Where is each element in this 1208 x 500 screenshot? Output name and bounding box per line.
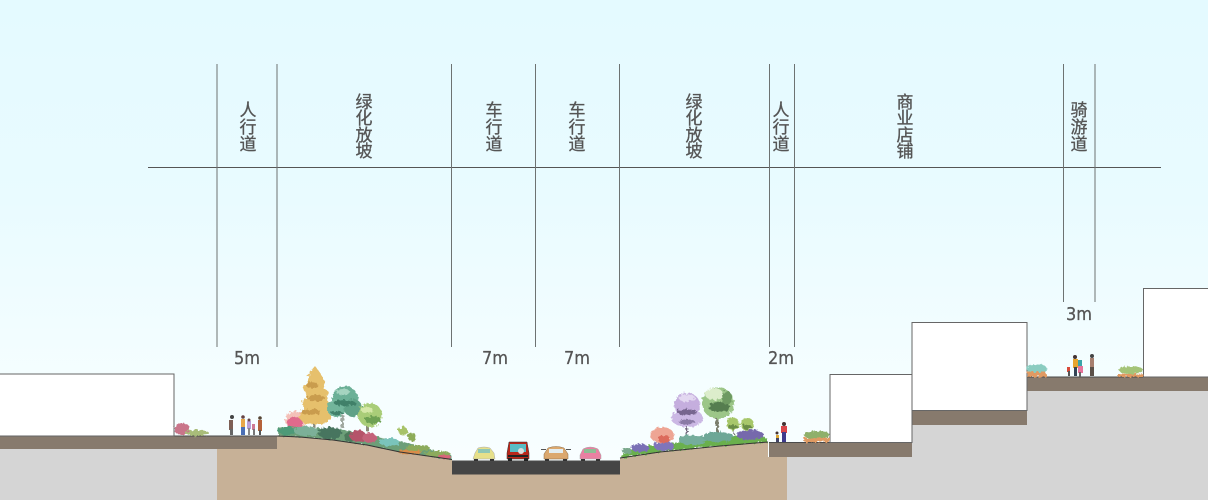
label: 绿化放坡 right: 化 bbox=[686, 109, 702, 128]
label: 商业店铺: 商 bbox=[896, 93, 914, 112]
tree: pale green bbox=[702, 387, 734, 434]
label: 车行道 second lane: 行 bbox=[568, 118, 586, 137]
label: 商业店铺: 铺 bbox=[896, 142, 914, 161]
label: 商业店铺: 店 bbox=[896, 126, 914, 145]
shrub: before right building bbox=[1118, 366, 1143, 377]
label: 绿化放坡 bbox=[356, 93, 372, 161]
label: 人行道 right: 道 bbox=[772, 135, 790, 154]
dimension lines bbox=[148, 64, 1161, 347]
width: 5m: 5m bbox=[234, 348, 260, 369]
building centre tall bbox=[912, 322, 1027, 410]
label: 车行道 second lane: 车 bbox=[568, 101, 586, 120]
label: 商业店铺: 业 bbox=[896, 109, 914, 128]
label: 绿化放坡: 放 bbox=[356, 126, 372, 145]
label: 车行道: 道 bbox=[486, 135, 502, 154]
label: 骑游道: 骑 bbox=[1070, 101, 1088, 120]
label: 车行道 second lane: 道 bbox=[568, 135, 586, 154]
label: 绿化放坡 right: 放 bbox=[686, 126, 702, 145]
label: 人行道: 道 bbox=[240, 135, 256, 154]
shrub: teal planter bbox=[1027, 364, 1047, 377]
road surface bbox=[452, 461, 620, 474]
shrub: pink flowering bbox=[285, 411, 307, 429]
label: 车行道: 行 bbox=[486, 118, 502, 137]
label: 人行道 right: 行 bbox=[772, 118, 790, 137]
label: 车行道 second lane bbox=[568, 101, 586, 154]
label: 绿化放坡: 化 bbox=[356, 109, 372, 128]
building centre low bbox=[830, 374, 912, 442]
label: 人行道 right: 人 bbox=[772, 101, 790, 120]
cars bbox=[473, 442, 601, 461]
label: 绿化放坡 right: 坡 bbox=[686, 142, 702, 161]
label: 绿化放坡: 坡 bbox=[356, 142, 372, 161]
label: 车行道: 车 bbox=[486, 101, 502, 120]
paved strips bbox=[0, 377, 1208, 457]
building right bbox=[1144, 288, 1208, 377]
label: 人行道 bbox=[240, 101, 256, 154]
car: pink bbox=[580, 447, 601, 461]
label: 车行道 bbox=[486, 101, 502, 154]
width: 2m: 2m bbox=[768, 348, 794, 369]
width: 7m: 7m bbox=[482, 348, 508, 369]
shrub: left of walkway bbox=[174, 423, 209, 436]
label: 商业店铺 bbox=[896, 93, 914, 161]
label: 绿化放坡 right: 绿 bbox=[686, 93, 702, 112]
tree: purple bbox=[671, 393, 703, 436]
car: red suv bbox=[507, 442, 529, 461]
slope edge lines bbox=[277, 436, 768, 460]
label: 人行道: 人 bbox=[240, 101, 256, 120]
people: left group bbox=[229, 415, 262, 435]
car: yellow bbox=[473, 447, 495, 461]
shrub: before low building bbox=[804, 431, 830, 442]
label: 绿化放坡 right bbox=[686, 93, 702, 161]
tree: small lime bbox=[358, 403, 382, 432]
label: 骑游道 bbox=[1070, 101, 1088, 154]
label: 绿化放坡: 绿 bbox=[356, 93, 372, 112]
tree: green bbox=[327, 386, 362, 428]
building left bbox=[0, 374, 174, 436]
label: 人行道 right bbox=[772, 101, 790, 154]
label: 人行道: 行 bbox=[240, 118, 256, 137]
car: tan bbox=[541, 446, 571, 461]
planting bed: left slope bbox=[278, 426, 452, 460]
tan earth cut bbox=[217, 436, 787, 500]
label: 骑游道: 道 bbox=[1070, 135, 1088, 154]
tree: yellow bbox=[298, 366, 332, 427]
label: 骑游道: 游 bbox=[1070, 118, 1088, 137]
width: 3m: 3m bbox=[1066, 304, 1092, 325]
tree: small pair bbox=[726, 418, 754, 434]
pavement top lines bbox=[0, 377, 1208, 461]
people: right group bbox=[1067, 354, 1094, 377]
planting bed: right slope bbox=[621, 427, 768, 458]
person group: centre walkway bbox=[776, 422, 787, 442]
width: 7m second lane: 7m bbox=[564, 348, 590, 369]
grey subgrade bbox=[0, 391, 1208, 500]
